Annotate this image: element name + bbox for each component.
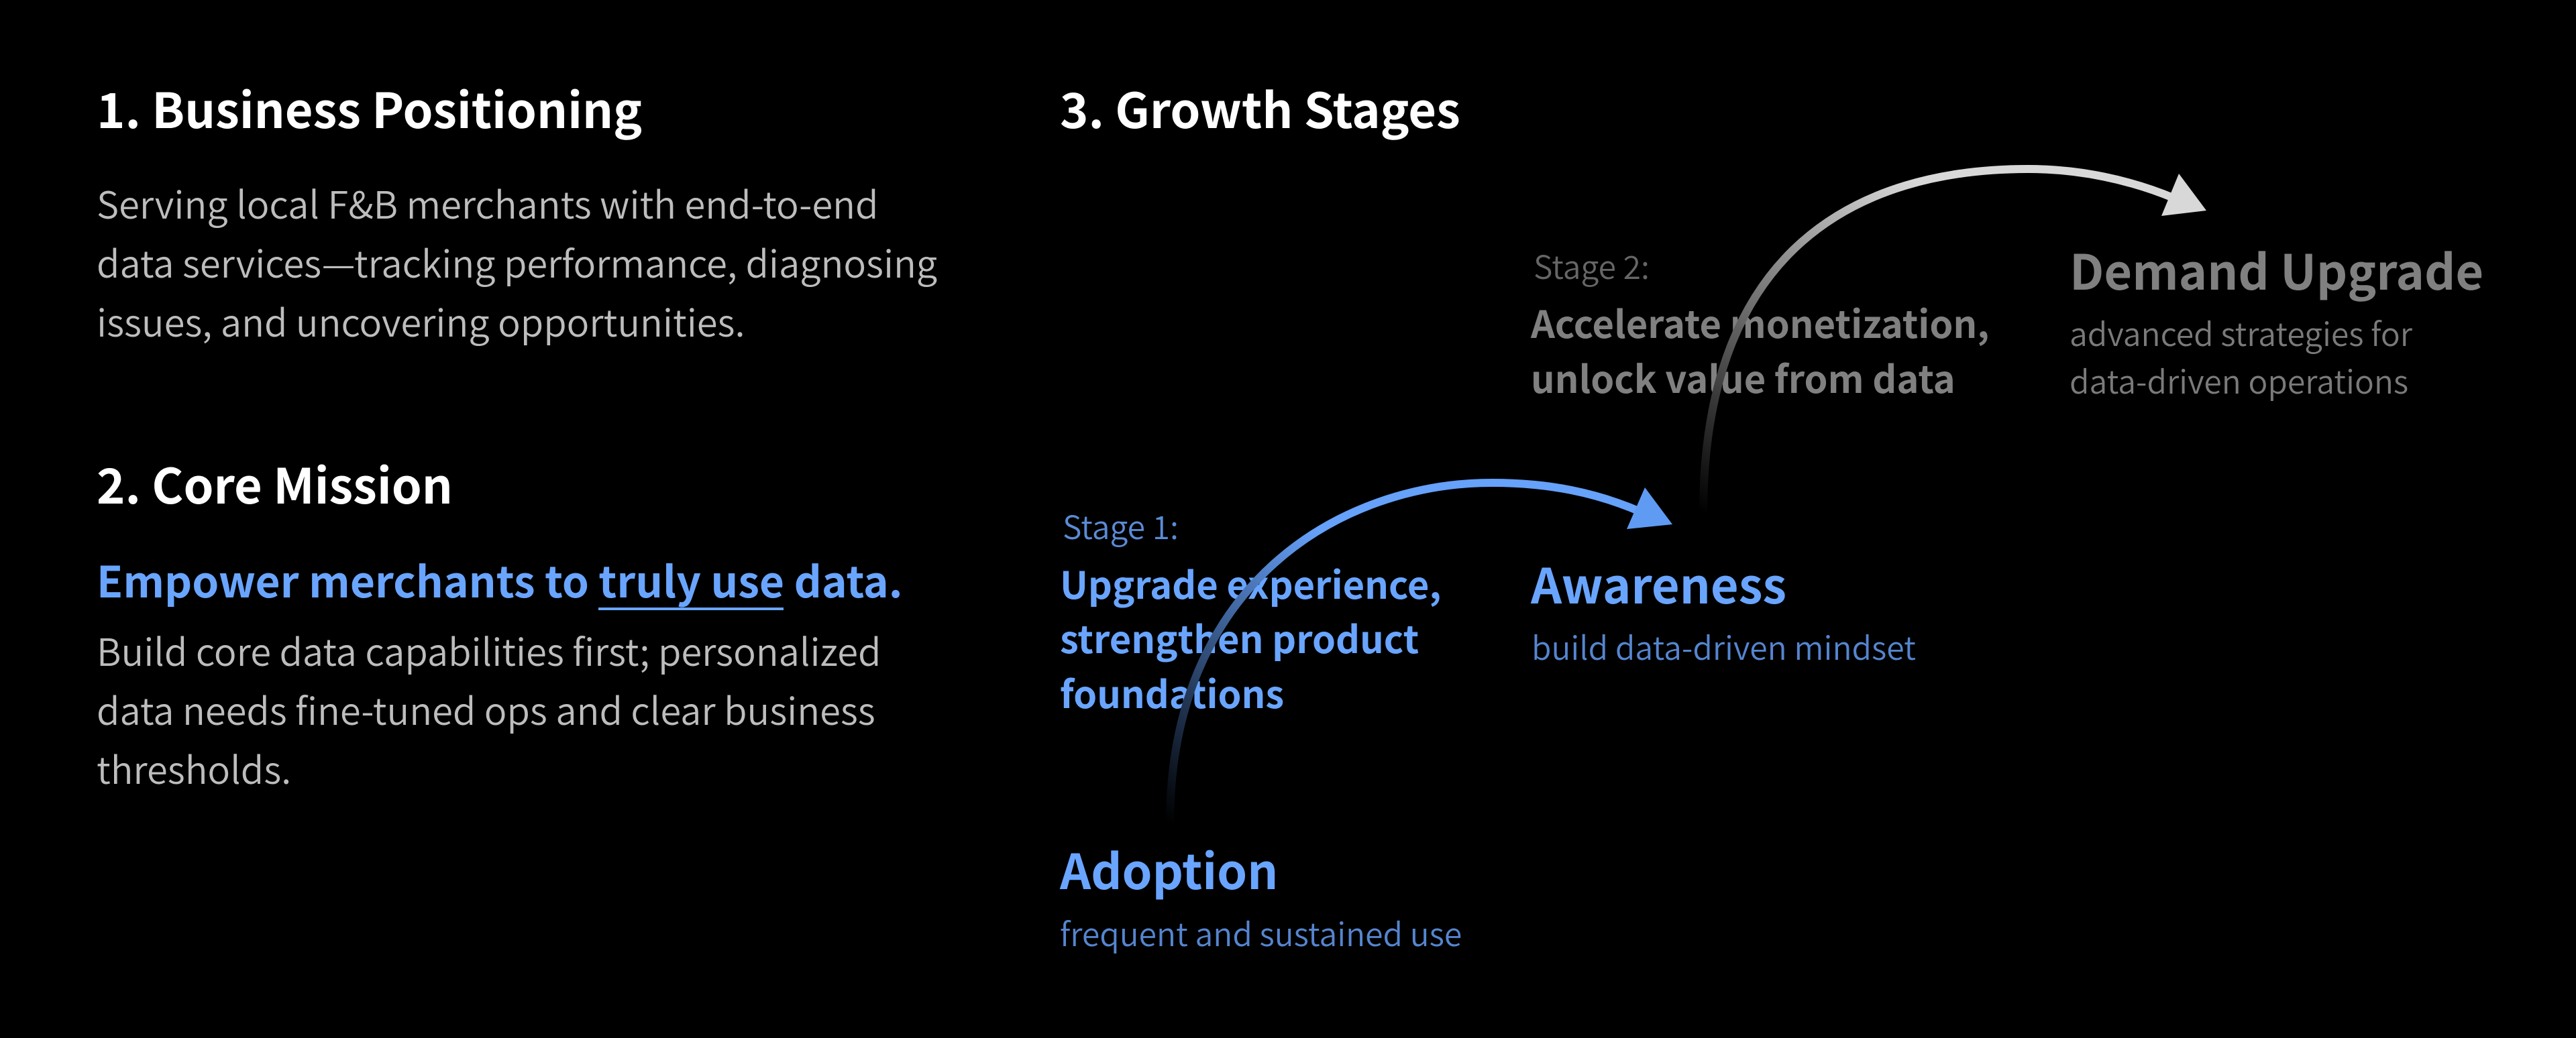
milestone: adoption: Adoption <box>1059 833 1278 903</box>
stage 1 description <box>1060 556 1442 719</box>
milestone: awareness: build data-driven mindset <box>1532 622 1916 669</box>
heading: growth stages: 3. Growth Stages <box>1060 72 1460 142</box>
text block: mission description: thresholds. <box>97 741 291 795</box>
stage 2 description: Accelerate monetization, <box>1530 295 1989 349</box>
milestone: awareness <box>1530 547 1916 669</box>
stage 2 description: unlock value from data <box>1531 350 1955 404</box>
milestone: awareness: Awareness <box>1530 547 1786 618</box>
stage 1 description: foundations <box>1060 665 1284 719</box>
stage 1 description: strengthen product <box>1060 610 1419 665</box>
text block: mission description: Build core data capabilities first; personalized <box>97 623 881 677</box>
text block: positioning description <box>97 176 937 348</box>
arrow: stage 1 curve <box>1170 483 1672 823</box>
section 1: business positioning <box>97 72 937 348</box>
heading: business positioning: 1. Business Positioning <box>97 72 642 142</box>
text block: positioning description: Serving local F&B merchants with end-to-end <box>97 176 878 230</box>
text block: mission description: data needs fine-tuned ops and clear business <box>97 682 875 736</box>
arrow: stage 2 curve <box>1703 169 2206 514</box>
milestone: demand upgrade: Demand Upgrade <box>2070 233 2483 304</box>
section 3: growth stages <box>1059 72 2483 956</box>
text block: positioning description: issues, and uncovering opportunities. <box>97 294 745 348</box>
highlighted mission statement: Empower merchants to truly use data. <box>97 549 903 610</box>
text block: mission description <box>97 623 881 795</box>
stage 2 description <box>1530 295 1989 404</box>
stage 1 label: Stage 1: <box>1063 502 1179 549</box>
stage 1 description: Upgrade experience, <box>1060 556 1442 610</box>
text block: positioning description: data services—tracking performance, diagnosing <box>97 235 937 289</box>
milestone: adoption <box>1059 833 1462 956</box>
milestone: demand upgrade <box>2070 233 2483 403</box>
milestone: demand upgrade: advanced strategies for <box>2070 308 2413 355</box>
milestone: demand upgrade: data-driven operations <box>2070 356 2408 403</box>
milestone: adoption: frequent and sustained use <box>1060 909 1462 956</box>
section 2: core mission <box>97 447 903 795</box>
stage 2 label: Stage 2: <box>1534 241 1650 288</box>
heading: core mission: 2. Core Mission <box>97 447 453 518</box>
